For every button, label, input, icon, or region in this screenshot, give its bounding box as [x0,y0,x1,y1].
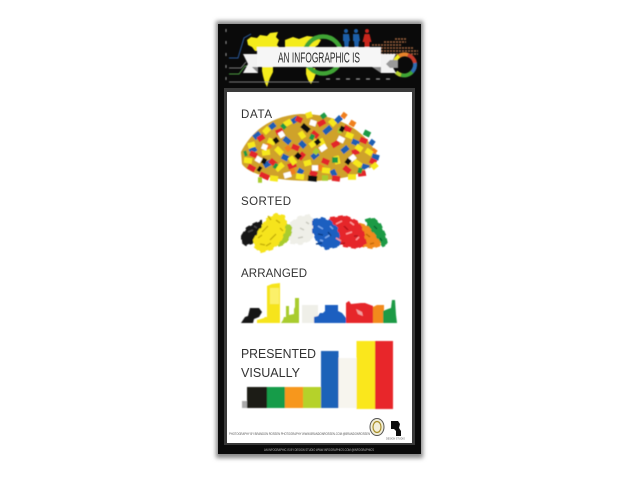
heading: arranged: ARRANGED [241,268,307,280]
bar: blue [321,351,338,408]
yellow stack [257,283,280,323]
donut chart [395,54,415,75]
bar: white [338,358,356,408]
black logo: DESIGN STUDIO [386,436,405,440]
round seal logo [370,418,384,436]
photo credit: PHOTOGRAPHY BY BRANDON ROSSEN PHOTOGRAPHY WWW.BRANDONROSSEN.COM @BRANDONROSSEN [229,432,370,436]
heading: data: DATA [241,109,272,121]
white stack [302,305,318,323]
poster shadow [216,21,423,458]
bar: lime [303,387,321,408]
arranged brick stacks [241,283,397,323]
lime stack [281,298,299,323]
footer text: AN INFOGRAPHIC IS BY DESIGN STUDIO WWW.INFOGRAPHICS.COM @INFOGRAPHICS [264,448,374,452]
orange stack [373,305,384,323]
bar: green [267,387,285,408]
brick dot map [372,39,418,54]
black pile [242,221,262,245]
lime pile [276,220,292,246]
pile of bricks [241,114,379,181]
yellow pile [254,214,286,252]
bar: black [247,387,267,408]
bar: orange [285,387,303,408]
line chart left [229,34,251,58]
red pile [329,216,366,248]
black logo [386,421,405,440]
white pile [288,215,313,244]
sorted brick piles [242,214,387,252]
orange pile [358,224,381,248]
white panel [224,88,415,445]
banner [257,47,381,67]
green stack [383,300,397,323]
black stack [241,308,262,323]
bar: gray stub [242,401,247,408]
header graphic [226,29,418,87]
world map [247,32,321,87]
green pile [366,218,387,246]
bar: red [375,341,393,409]
red stack [346,301,373,323]
heading: sorted: SORTED [241,196,291,208]
banner title: AN INFOGRAPHIC IS [278,50,360,66]
heading: presented visually: PRESENTED [241,346,316,361]
blue stack [314,305,346,323]
bar: yellow [356,341,376,409]
blue pile [313,218,340,249]
heading: presented visually: VISUALLY [241,365,300,380]
green ring [304,36,342,74]
poster black background [218,24,421,454]
banner ribbon tails [243,54,258,73]
year axis [326,78,396,80]
brick bar chart [242,341,393,409]
heading: presented visually [241,346,316,380]
people icons [343,29,372,47]
